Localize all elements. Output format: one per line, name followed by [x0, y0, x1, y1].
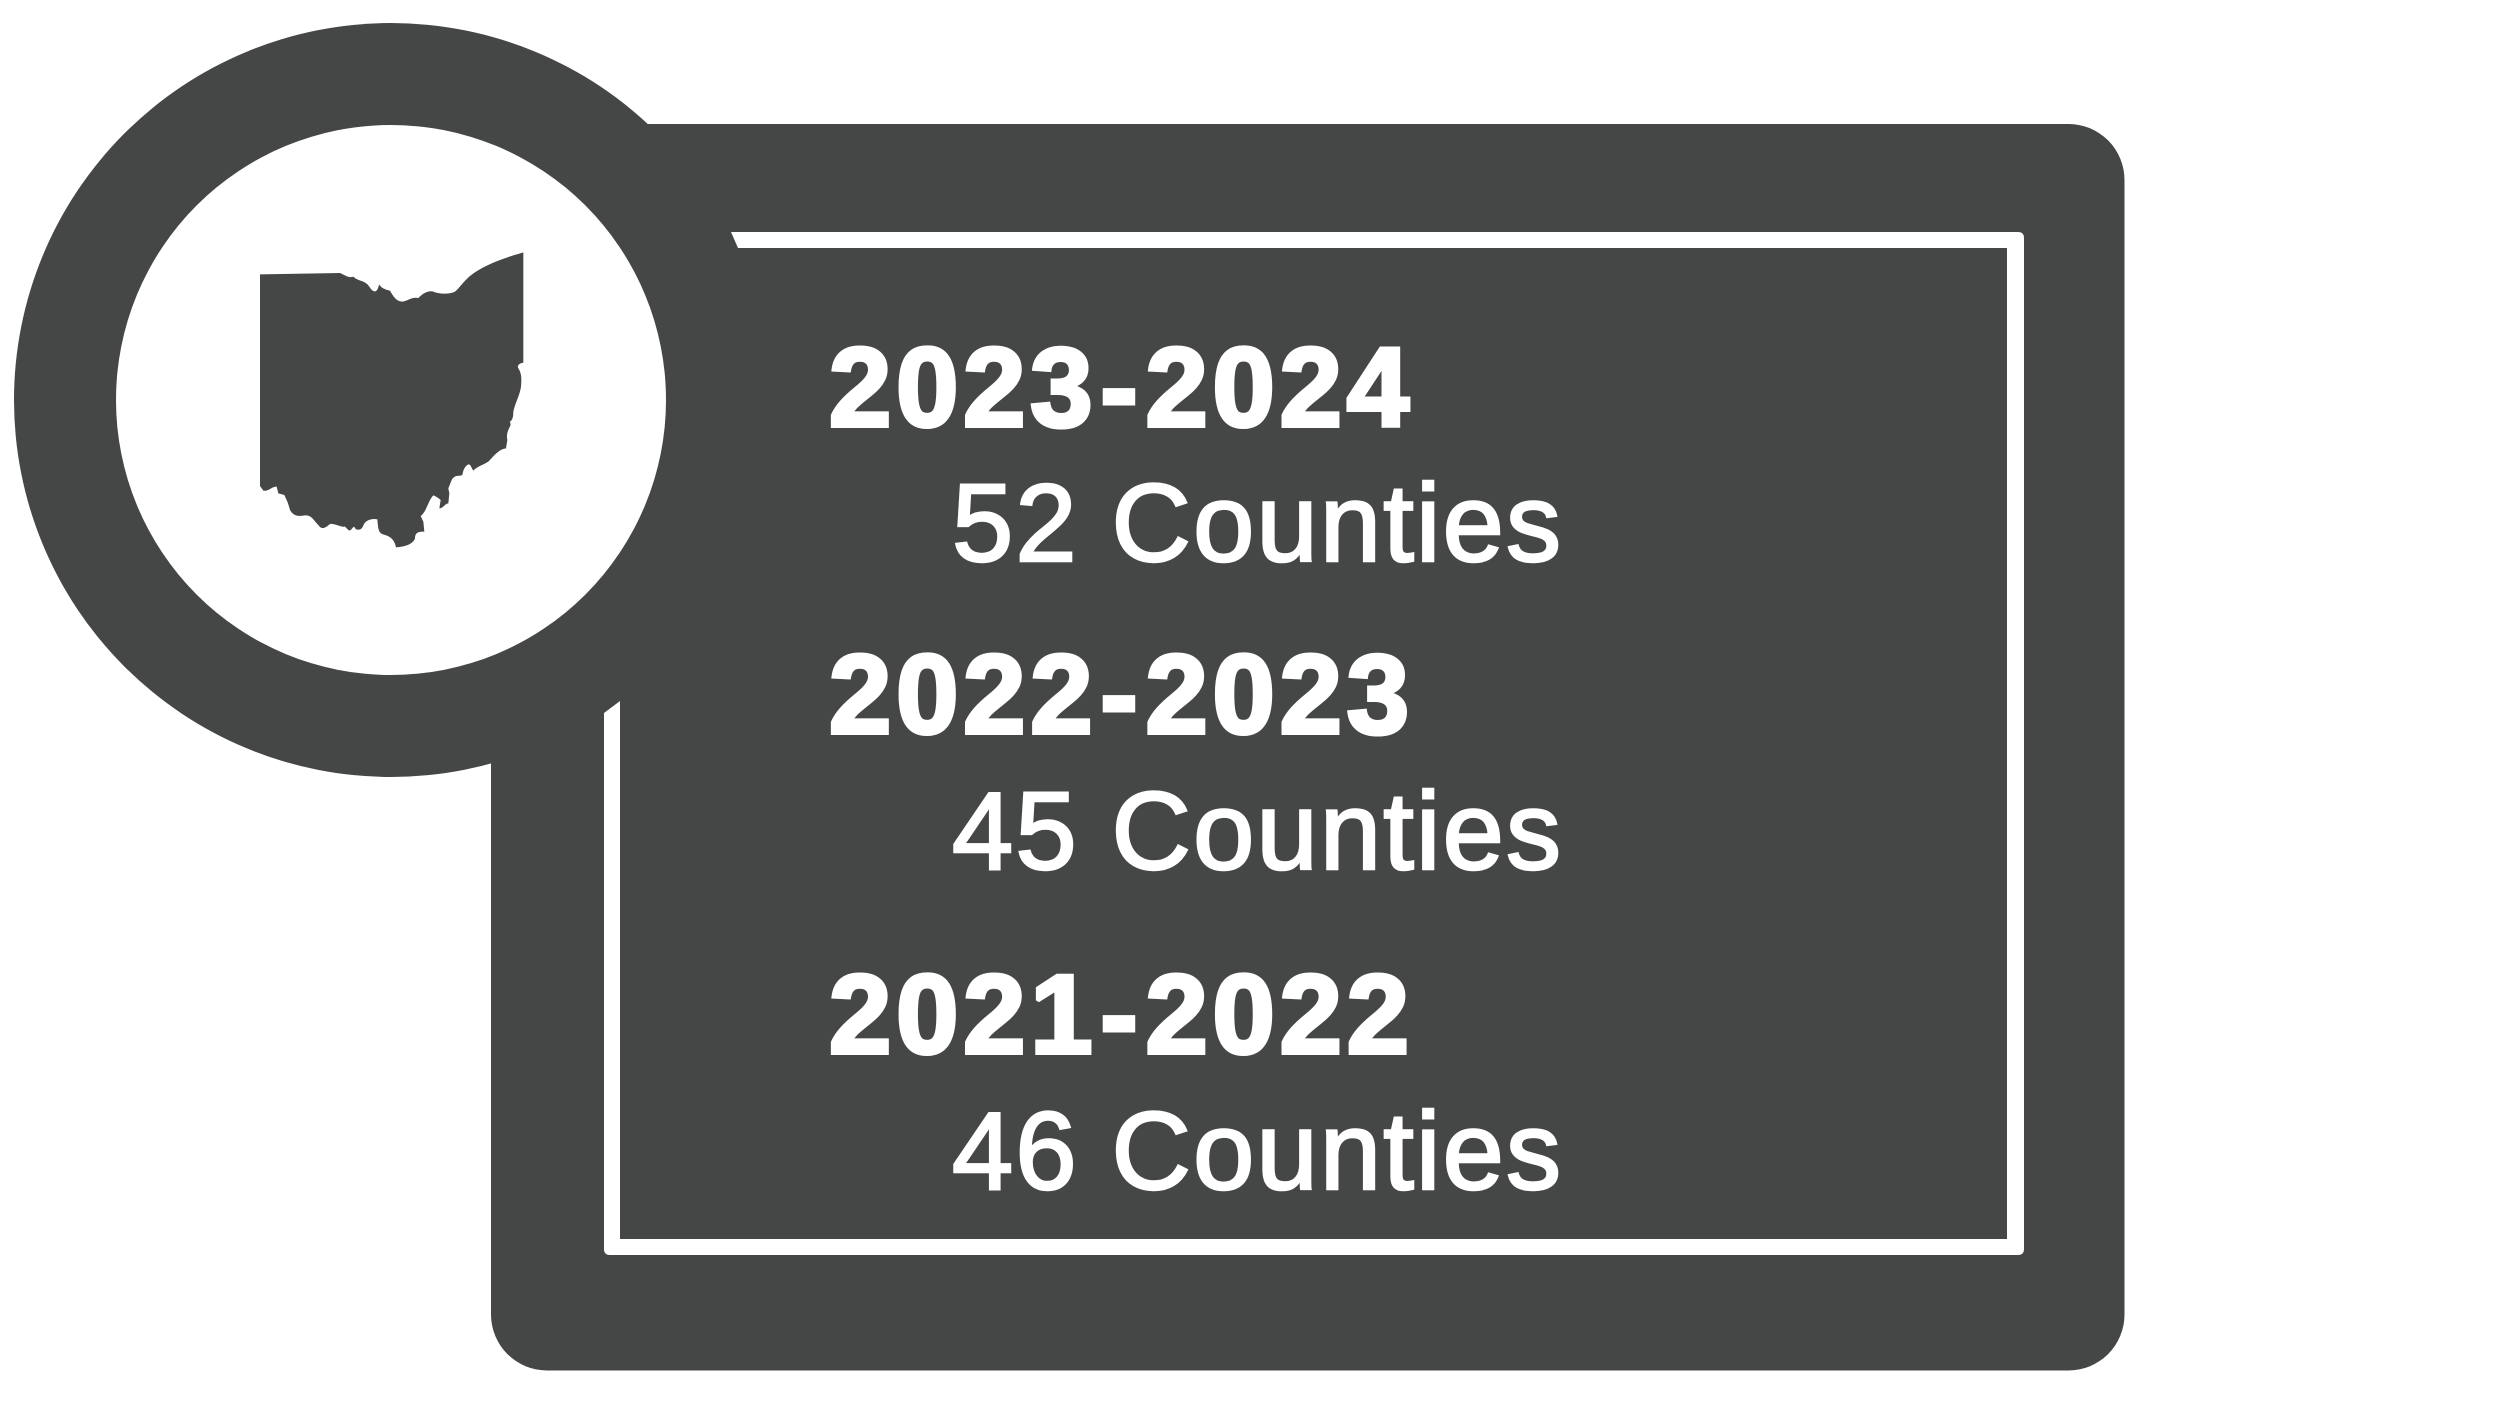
entry: 2022-2023 [829, 632, 1563, 893]
panel: dark rounded background [491, 124, 2124, 1370]
county count 45: 45 Counties [952, 770, 1563, 893]
year heading 2023-2024: 2023-2024 [829, 325, 1414, 450]
year heading 2021-2022: 2021-2022 [829, 952, 1414, 1077]
entry: 2023-2024 [829, 325, 1563, 585]
county count 46: 46 Counties [952, 1090, 1563, 1213]
year heading 2022-2023: 2022-2023 [829, 632, 1414, 757]
icon: Ohio state silhouette [260, 252, 523, 547]
entry: 2021-2022 [829, 952, 1563, 1213]
white frame around the text [604, 232, 2024, 1255]
county count 52: 52 Counties [952, 462, 1563, 585]
circle badge: white interior [116, 125, 666, 675]
circle badge: dark ring [14, 23, 768, 777]
